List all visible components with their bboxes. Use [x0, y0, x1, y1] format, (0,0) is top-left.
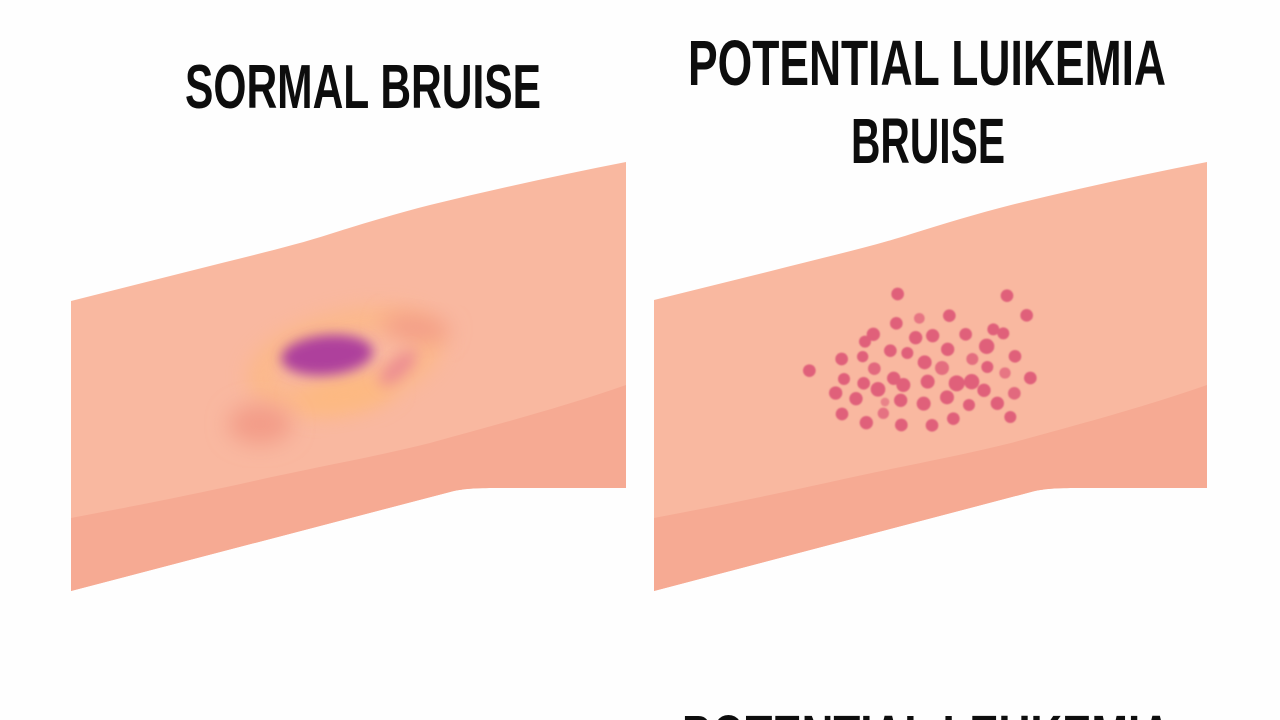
- heading: potential leukemia bruise: BRUISE: [851, 105, 1005, 177]
- heading: normal bruise: SORMAL BRUISE: [185, 53, 541, 122]
- petechiae dots: [803, 288, 1037, 432]
- arm skin: [71, 162, 626, 591]
- bruise: yellow halo: [251, 304, 439, 416]
- arm shadow band: [71, 385, 626, 591]
- arm skin: [654, 162, 1207, 591]
- bruise: red patch lower left: [228, 404, 292, 444]
- heading: potential leukemia bruise: [688, 27, 1166, 177]
- panel: normal bruise arm: [71, 162, 626, 591]
- panel: leukemia bruise arm: [654, 162, 1207, 591]
- arm shadow band: [654, 385, 1207, 591]
- bruise: crescent right: [374, 345, 422, 391]
- bruise: red patch upper right: [381, 310, 451, 346]
- bruise: [228, 304, 451, 444]
- bruise: purple core: [279, 331, 375, 379]
- bruise: yellow lower fill: [295, 368, 395, 420]
